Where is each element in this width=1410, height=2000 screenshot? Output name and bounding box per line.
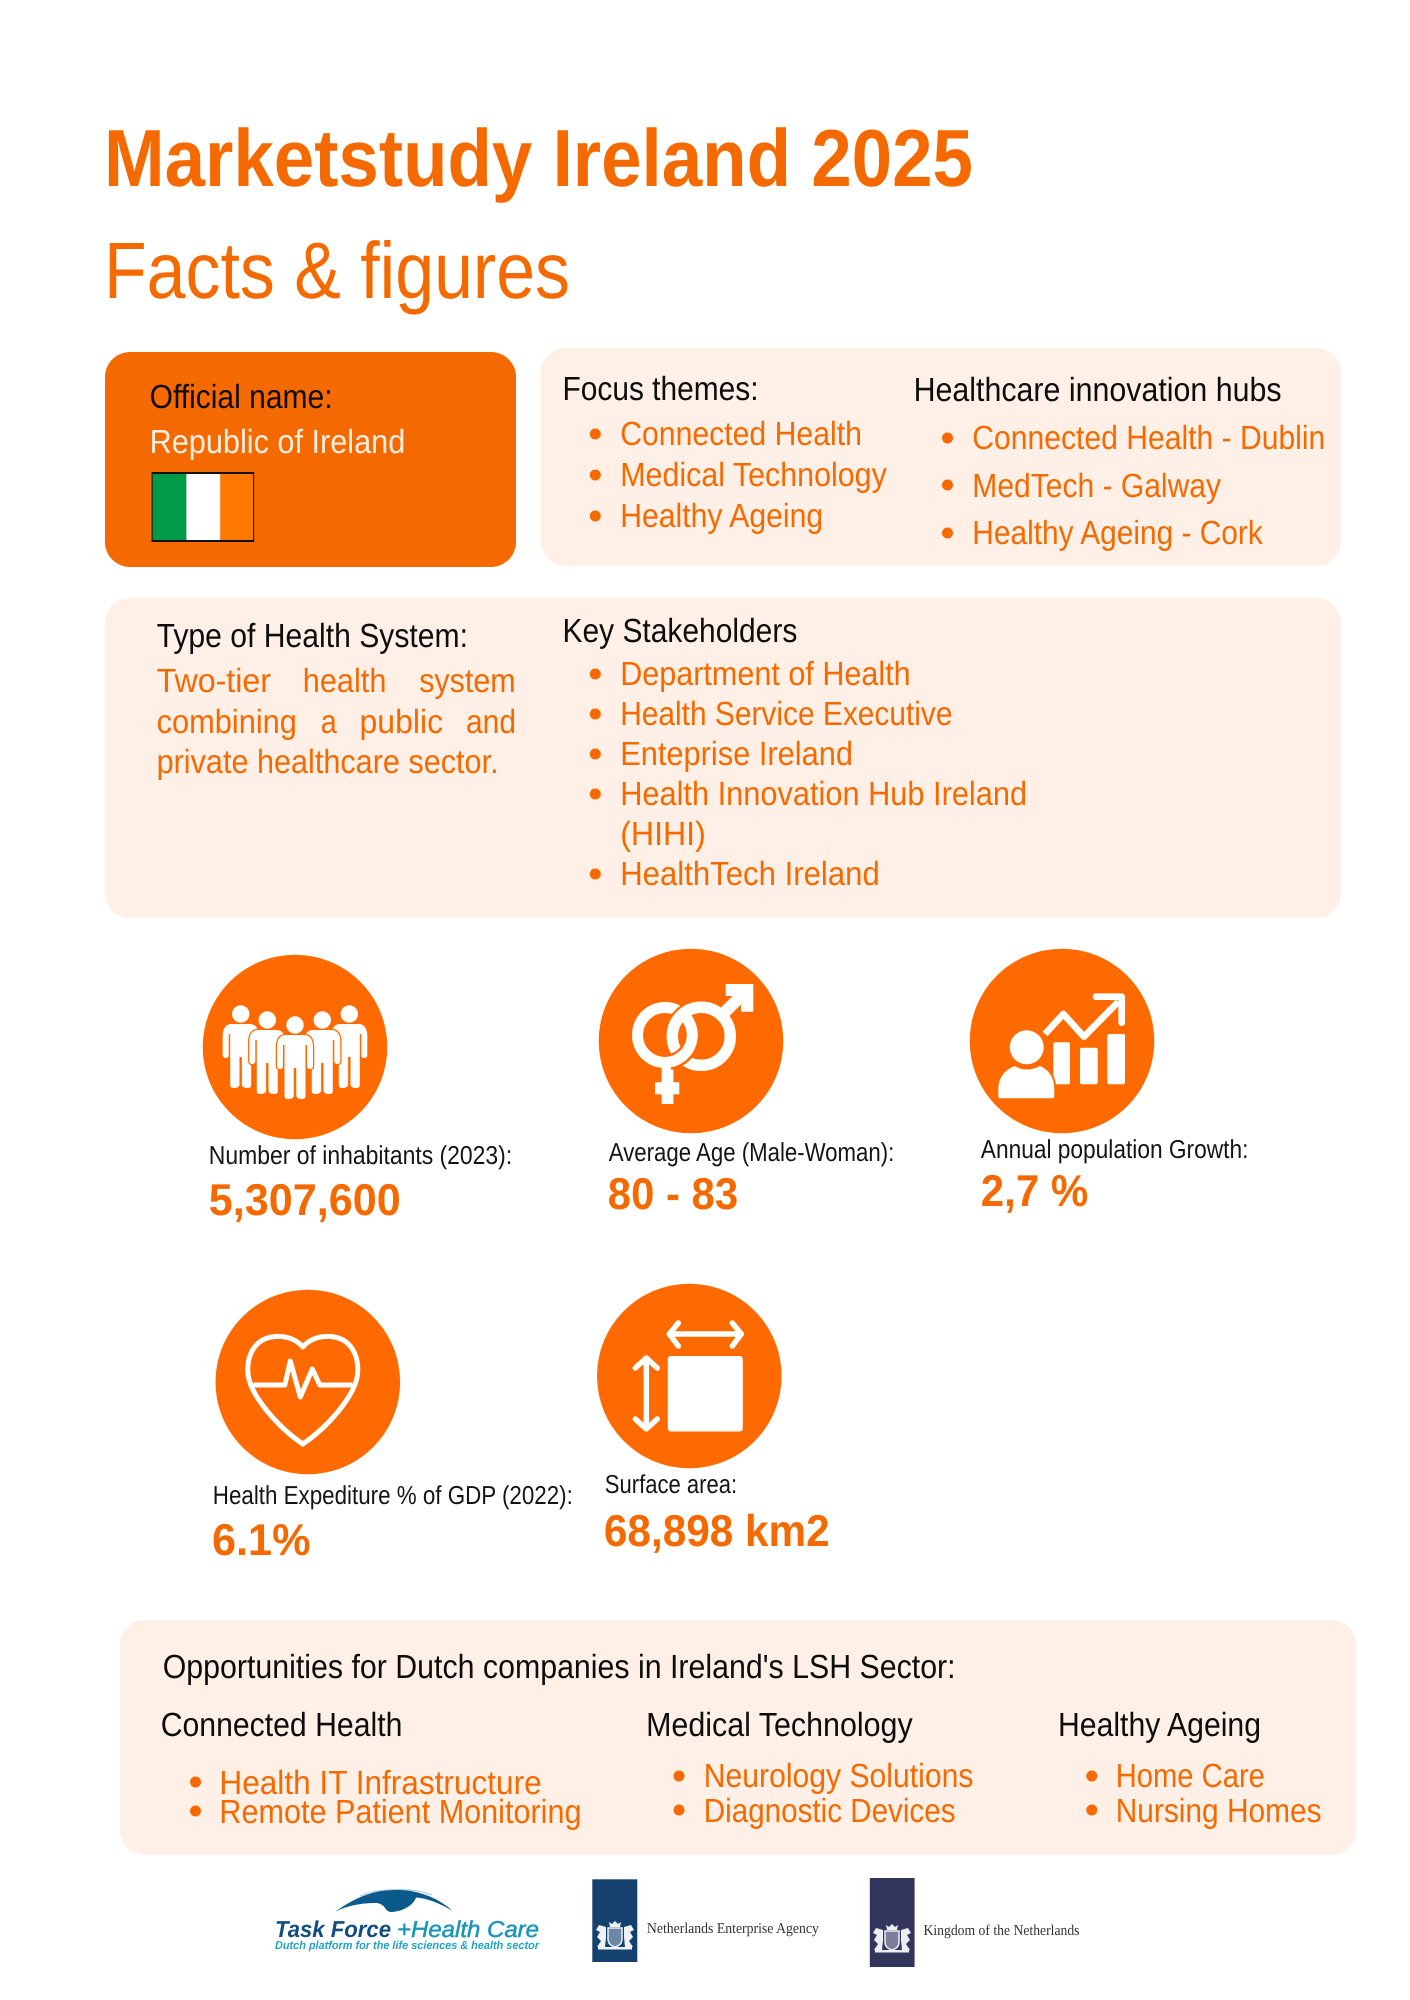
average age label: Average Age (Male-Woman): (609, 1137, 894, 1167)
average age value: 80 - 83 (608, 1170, 738, 1219)
connected health column: Connected Health (161, 1707, 402, 1744)
health expenditure label: Health Expediture % of GDP (2022): (213, 1480, 573, 1510)
health expenditure value: 6.1% (212, 1516, 310, 1565)
stakeholders list: Health Innovation Hub Ireland (620, 776, 1027, 813)
logo: Task Force Health Care: Dutch platform for the life sciences & health sector (275, 1940, 539, 1952)
opportunities heading: Opportunities for Dutch companies in Ireland's LSH Sector: (163, 1649, 956, 1686)
title: Marketstudy Ireland 2025 (104, 114, 973, 204)
logo: Netherlands Enterprise Agency: Netherlands Enterprise Agency (647, 1921, 819, 1937)
population growth label: Annual population Growth: (981, 1134, 1248, 1164)
stat: surface area (597, 1284, 830, 1556)
health system description: health (303, 663, 386, 700)
healthy ageing column: Nursing Homes (1116, 1793, 1322, 1830)
stakeholders list: (HIHI) (620, 816, 706, 853)
logo: Kingdom of the Netherlands (870, 1878, 1080, 1967)
connected health column: Remote Patient Monitoring (219, 1794, 582, 1831)
icon: gender symbols (599, 949, 783, 1133)
panel: focus themes and innovation hubs (541, 348, 1341, 566)
panel: official name (105, 352, 516, 567)
medical technology column: Neurology Solutions (704, 1758, 973, 1795)
health system description: combining (157, 704, 297, 741)
surface area label: Surface area: (605, 1469, 737, 1499)
stat: health expenditure (212, 1290, 573, 1565)
stakeholders list: Health Service Executive (620, 696, 952, 733)
stakeholders list: HealthTech Ireland (620, 856, 880, 893)
focus themes list: Medical Technology (620, 457, 887, 494)
population growth value: 2,7 % (981, 1167, 1088, 1216)
icon: heart with pulse (216, 1290, 400, 1474)
healthy ageing column: Home Care (1116, 1758, 1265, 1795)
stakeholders list: Department of Health (620, 656, 911, 693)
innovation hubs heading: Healthcare innovation hubs (914, 372, 1282, 409)
focus themes list: Connected Health (620, 416, 862, 453)
inhabitants value: 5,307,600 (209, 1176, 401, 1225)
health system description (157, 663, 516, 781)
stat: average age (599, 949, 894, 1219)
focus themes list (590, 416, 887, 535)
connected health column: Health IT Infrastructure (219, 1765, 542, 1802)
connected health column (161, 1707, 581, 1831)
health system description: a (321, 704, 337, 741)
panel: health system and stakeholders (105, 598, 1341, 918)
subtitle: Facts & figures (104, 226, 570, 315)
stat: inhabitants (203, 955, 512, 1225)
icon: square with dimension arrows (597, 1284, 782, 1468)
health system description: system (419, 663, 516, 700)
stakeholders list: Enteprise Ireland (620, 736, 853, 773)
innovation hubs list: MedTech - Galway (972, 468, 1221, 505)
healthy ageing column (1058, 1707, 1322, 1830)
logo: Kingdom of the Netherlands: Kingdom of the Netherlands (924, 1923, 1080, 1939)
innovation hubs list: Healthy Ageing - Cork (972, 515, 1263, 552)
icon: group of people (203, 955, 387, 1139)
stakeholders heading: Key Stakeholders (562, 613, 797, 650)
stat: population growth (970, 949, 1248, 1216)
focus themes list: Healthy Ageing (620, 498, 823, 535)
icon: crest (873, 1924, 911, 1952)
inhabitants label: Number of inhabitants (2023): (209, 1140, 512, 1170)
official name value: Republic of Ireland (150, 424, 405, 461)
medical technology column: Diagnostic Devices (704, 1793, 956, 1830)
medical technology column (646, 1707, 973, 1830)
innovation hubs list (942, 420, 1325, 552)
icon: person with growth chart (970, 949, 1154, 1133)
logo: Netherlands Enterprise Agency (592, 1879, 819, 1962)
logo: Task Force Health Care: Task Force (275, 1916, 391, 1942)
healthy ageing column: Healthy Ageing (1058, 1707, 1261, 1744)
icon: crest (596, 1921, 634, 1950)
medical technology column: Medical Technology (646, 1707, 913, 1744)
logo: Task Force Health Care: +Health Care (397, 1916, 539, 1942)
innovation hubs list: Connected Health - Dublin (972, 420, 1325, 457)
health system description: Two-tier (157, 663, 271, 700)
surface area value: 68,898 km2 (604, 1507, 830, 1556)
stakeholders list (590, 656, 1027, 893)
official name label: Official name: (150, 379, 333, 416)
health system description: private healthcare sector. (157, 744, 499, 781)
health system description: and (466, 704, 516, 741)
health system description: public (360, 704, 443, 741)
focus themes heading: Focus themes: (562, 371, 758, 408)
icon: Irish flag (152, 472, 254, 542)
health system heading: Type of Health System: (157, 618, 468, 655)
panel: opportunities (120, 1620, 1356, 1855)
logo: Task Force Health Care (275, 1889, 539, 1952)
